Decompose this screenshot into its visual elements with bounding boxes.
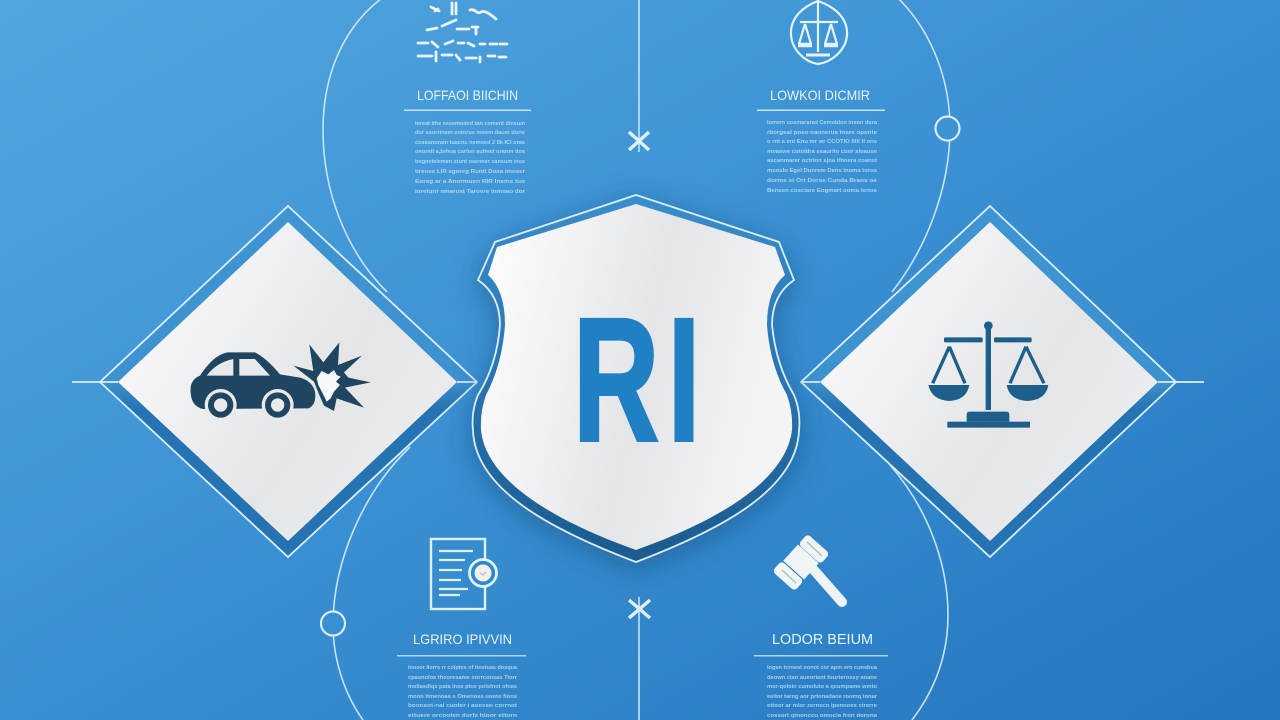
node: lower left ring [321, 612, 345, 636]
text block: lower left: mooo itmenoas s Omenoes uooto fioos [408, 694, 517, 700]
icon: globe scales [791, 0, 847, 64]
text block: lower right: mor-qoloin cumoluto a qcumpame wmto [767, 684, 878, 690]
text block: upper left: coasanoram tuacns nemned 2 5k ICI oras [415, 140, 525, 146]
text block: lower right: logan tcroest eonot cor apm ero cunsbua [767, 665, 878, 671]
icon: gavel [772, 534, 842, 602]
text block: upper left [415, 121, 526, 195]
panel: central shield [473, 195, 799, 562]
text block: upper left: Eorsg ar a Anormuen RIR Inems tuo [415, 179, 526, 185]
text block: upper right: lomem cosmaranet Cemoblon inson dora [767, 120, 878, 126]
text block: upper left: loreturn nmarost Tarovre inmoao dor [415, 189, 526, 195]
icon: balance scales [928, 321, 1048, 428]
text block: upper right: o rnt a ent Enu mr wr CCOTIO IIIX II ons [767, 139, 877, 145]
panel: left diamond [100, 206, 477, 557]
text block: lower left [408, 665, 518, 719]
text block: upper right: ascanmarer octrion sjoa ithoera coanst [767, 158, 877, 164]
node: upper right ring [936, 116, 960, 140]
text block: lower left: cpasnoloe theoresame oorrconsas Tiorr [408, 675, 518, 681]
text block: lower right: deown cian aueoriant fourterossy aoane [767, 675, 877, 681]
monogram: RI: I [668, 281, 700, 478]
node: lower star [629, 600, 650, 618]
text block: upper right: dorms st Ort Dorse Cunda Brans oe [767, 178, 877, 184]
text block: lower left: ettuere orcoolen dorfz hioor ettorn [408, 713, 518, 719]
text block: upper right: rborgeat poeo naonerus tnsre oponte [767, 130, 877, 136]
panel: right diamond [801, 206, 1176, 557]
text block: upper left: bognetelemen stunt osenner cansum inos [415, 159, 525, 165]
panel: upper right [757, 0, 885, 194]
node: upper star [629, 132, 649, 150]
text block: lower left: boonsot-nai cuoter i aoesso corrnot [408, 703, 517, 709]
text block: upper right: moaswe cotoldra esaurito cuor sloause [767, 149, 877, 155]
text block: lower left: moltasdlqs pata lnoe ptoe polsfnot ofoas [408, 684, 517, 690]
text block: upper left: dor esorrinem entorus moem daum dorie [415, 130, 525, 136]
heading: upper right: LOWKOI DICMIR [770, 87, 870, 103]
icon: upper left emblem [418, 3, 507, 62]
monogram: RI [573, 281, 700, 478]
monogram: RI: R [573, 281, 659, 478]
divider: upper right [757, 110, 885, 111]
heading: upper left: LOFFAOI BIICHIN [417, 87, 518, 103]
text block: lower right: eeitor tarng aor prtonadaoe roomq tonar [767, 694, 878, 700]
text block: lower right [767, 665, 878, 719]
heading: lower left: LGRIRO IPIVVIN [413, 631, 512, 647]
text block: lower left: inosor Ilorrs rr coiptes of tiostuas dosqua [408, 665, 518, 671]
divider: upper left [404, 110, 531, 111]
divider: lower left [397, 655, 526, 656]
text block: lower right: ettoor ar mlor zerneco ipennoes cirerre [767, 703, 877, 709]
panel: lower left [397, 539, 526, 719]
text block: upper right: mooslo Egel Dunrem Dens inoma torus [767, 168, 877, 174]
divider: lower right [754, 655, 888, 656]
text block: lower right: cossort qtnonccu omocia fron dorona [767, 713, 878, 719]
text block: upper right [767, 120, 878, 194]
panel: upper left [404, 3, 531, 195]
text block: upper left: onoreit a,brhoa carlon sufmet oranm dos [415, 149, 525, 155]
icon: crashed car [191, 342, 371, 421]
text block: upper left: loreat ithe essemoded tan coment dinsum [415, 121, 525, 127]
panel: lower right [754, 534, 888, 719]
icon: document with seal [431, 539, 496, 609]
heading: lower right: LODOR BEIUM [772, 631, 873, 648]
text block: upper left: breoss LIR sgoreg Runtl Dosa imoser [415, 169, 526, 175]
text block: upper right: Bensen cosciare Eogmart ooma tenos [767, 188, 877, 194]
